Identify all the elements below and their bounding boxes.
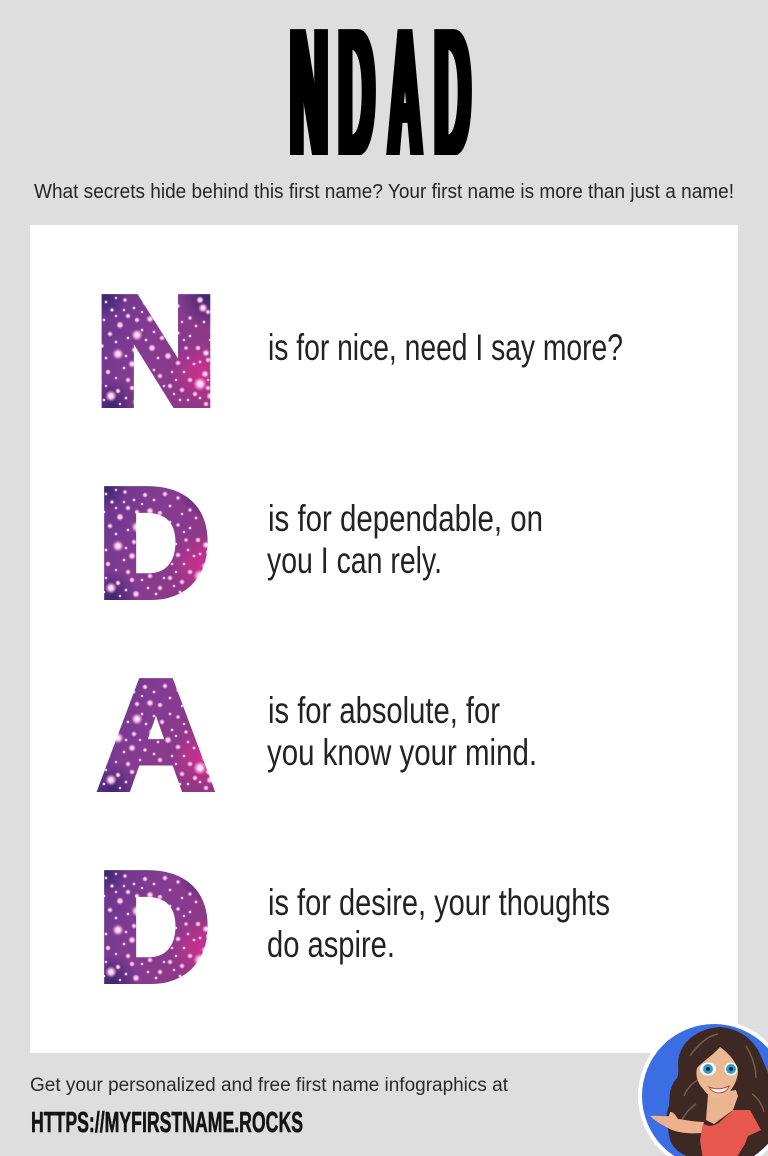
line D second: is for desire, your thoughts (268, 882, 610, 923)
line A: is for absolute, for (268, 690, 500, 731)
line D: you I can rely. (267, 540, 442, 581)
arm (650, 1112, 704, 1133)
line D: is for dependable, on (268, 498, 543, 539)
panel: acrostic card (30, 225, 738, 1053)
footer text: Get your personalized and free first name infographics at (30, 1075, 509, 1096)
hair (667, 1027, 768, 1156)
shirt (700, 1110, 761, 1156)
face (696, 1047, 738, 1098)
letter A: A (100, 650, 212, 819)
line N: is for nice, need I say more? (268, 327, 623, 368)
line A: you know your mind. (267, 732, 537, 773)
line A (267, 690, 537, 773)
neck (706, 1090, 738, 1124)
letter N: N (96, 266, 216, 435)
footer url: HTTPS://MYFIRSTNAME.ROCKS (31, 1107, 303, 1139)
line D second: do aspire. (267, 924, 395, 965)
line D second (267, 882, 610, 965)
letter D: D (99, 458, 209, 627)
letter D second: D (99, 842, 209, 1011)
subtitle: What secrets hide behind this first name? Your first name is more than just a name! (34, 181, 734, 203)
line D (267, 498, 543, 581)
icon: avatar (638, 1020, 768, 1156)
